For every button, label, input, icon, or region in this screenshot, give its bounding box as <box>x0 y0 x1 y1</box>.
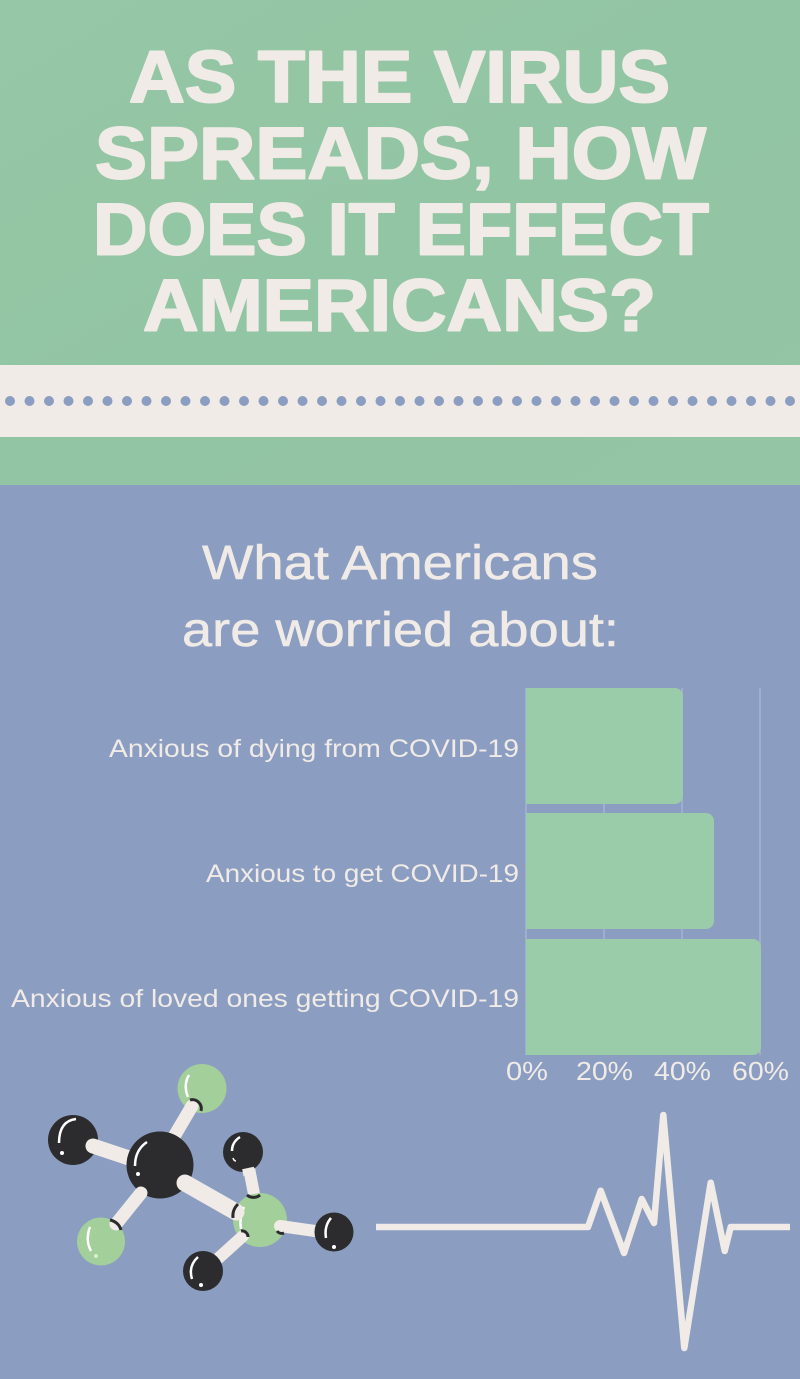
bar: anxious of loved ones <box>526 939 761 1055</box>
title: AMERICANS? <box>143 266 656 346</box>
atom: black centre <box>126 1132 194 1198</box>
bond: left and top <box>93 1106 192 1159</box>
atom: green top <box>178 1064 226 1113</box>
bar: anxious to get <box>526 813 714 929</box>
bar chart <box>11 688 789 1086</box>
axis labels: 20% <box>576 1056 633 1086</box>
bond caps <box>110 1195 284 1237</box>
axis labels: 0% <box>506 1056 548 1086</box>
axis labels <box>506 1056 789 1086</box>
icon: molecule <box>48 1064 354 1291</box>
bar: anxious of dying <box>526 688 683 804</box>
atom: green bottom left <box>77 1218 125 1266</box>
bonds: centre, bottom-left, upper right, right, bottom <box>116 1168 322 1264</box>
axis labels: 40% <box>654 1056 711 1086</box>
title: DOES IT EFFECT <box>93 190 709 270</box>
title: AS THE VIRUS <box>129 37 670 118</box>
axis labels: 60% <box>732 1056 789 1086</box>
atom: black top right <box>223 1132 263 1175</box>
category labels <box>11 735 519 1013</box>
heading: what Americans are worried about <box>182 537 619 657</box>
title: SPREADS, HOW <box>95 114 706 194</box>
icon: heartbeat line <box>376 1115 790 1348</box>
dotted divider band <box>0 365 800 437</box>
atom: black right <box>314 1212 354 1252</box>
heading: what Americans are worried about: What Americans <box>202 537 598 590</box>
atom: black left <box>48 1115 98 1165</box>
atom: green right <box>233 1193 287 1247</box>
title <box>93 37 709 346</box>
category labels: Anxious to get COVID-19 <box>206 860 519 888</box>
heading: what Americans are worried about: are worried about: <box>182 604 619 657</box>
category labels: Anxious of loved ones getting COVID-19 <box>11 985 519 1013</box>
atom: black bottom <box>183 1251 223 1291</box>
panel: header <box>0 0 800 485</box>
bond cap: top <box>190 1100 201 1111</box>
category labels: Anxious of dying from COVID-19 <box>109 735 519 763</box>
